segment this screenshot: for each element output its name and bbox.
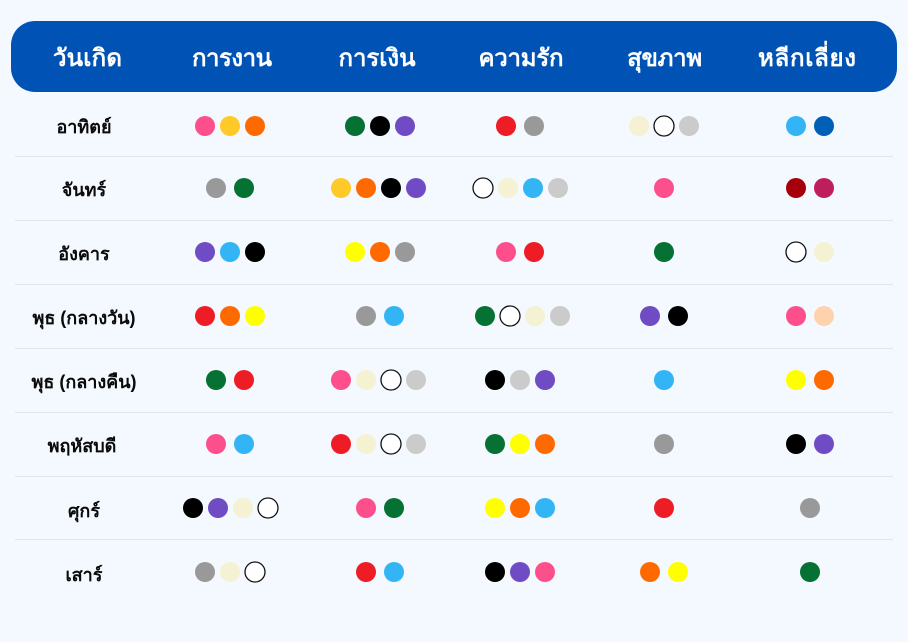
row: Tuesday: อังคาร xyxy=(58,244,110,264)
heading: finance: การเงิน xyxy=(338,45,416,72)
row: Wednesday night xyxy=(31,370,834,394)
row: Thursday xyxy=(48,434,834,456)
row: Monday xyxy=(62,178,834,200)
row: Saturday xyxy=(66,562,820,585)
row: Sunday xyxy=(56,116,834,137)
heading: health: สุขภาพ xyxy=(627,45,702,74)
heading: love: ความรัก xyxy=(478,45,564,72)
row: Wednesday daytime xyxy=(32,306,834,330)
row: Tuesday xyxy=(58,242,834,264)
row: Wednesday daytime: พุธ (กลางวัน) xyxy=(32,308,136,330)
row: Friday xyxy=(68,498,820,523)
heading: birthday: วันเกิด xyxy=(53,45,122,72)
heading: avoid: หลีกเลี่ยง xyxy=(758,40,856,72)
header bar xyxy=(11,21,897,92)
row: Wednesday night: พุธ (กลางคืน) xyxy=(31,372,137,394)
row: Sunday: อาทิตย์ xyxy=(56,116,112,137)
row: Saturday: เสาร์ xyxy=(66,564,103,585)
heading: work: การงาน xyxy=(192,45,273,72)
row: Friday: ศุกร์ xyxy=(68,500,100,523)
row: Monday: จันทร์ xyxy=(62,179,107,200)
row: Thursday: พฤหัสบดี xyxy=(48,436,116,456)
